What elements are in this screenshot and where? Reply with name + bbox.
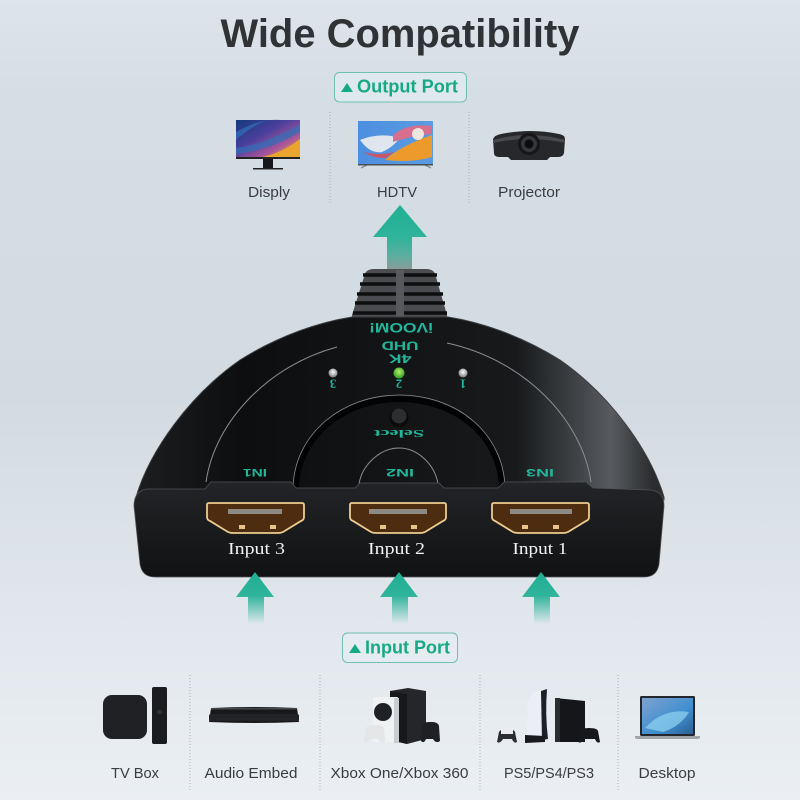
dome arcs bbox=[206, 343, 591, 487]
front face bbox=[134, 482, 664, 577]
output arrow bbox=[373, 205, 427, 270]
label: Desktop: Desktop bbox=[638, 765, 696, 782]
input labels on front: Input 1 bbox=[512, 539, 568, 558]
port labels on dome: IN3 bbox=[526, 466, 554, 478]
icon: laptop bbox=[635, 696, 700, 739]
icon: HDTV bbox=[358, 121, 433, 168]
badge: input port bbox=[342, 633, 458, 662]
icon: TV box bbox=[103, 687, 167, 744]
cable neck bbox=[352, 269, 447, 320]
icon: audio embed player bbox=[209, 707, 299, 723]
HDMI port 2 bbox=[350, 503, 446, 533]
label: Audio Embed: Audio Embed bbox=[204, 765, 298, 782]
HDMI port 3 bbox=[207, 503, 304, 533]
label: HDTV: HDTV bbox=[377, 184, 417, 201]
input labels on front: Input 2 bbox=[368, 539, 425, 558]
input labels on front: Input 3 bbox=[228, 539, 285, 558]
label: PS5/PS4/PS3: PS5/PS4/PS3 bbox=[504, 765, 594, 782]
input labels on front bbox=[228, 539, 568, 558]
select button: Select bbox=[373, 427, 424, 438]
title: Wide Compatibility bbox=[220, 12, 580, 56]
port labels on dome: IN2 bbox=[386, 466, 414, 478]
icon: Xbox consoles bbox=[364, 688, 440, 744]
brand and resolution text: UHD bbox=[381, 338, 418, 352]
brand and resolution text: iVOOM! bbox=[369, 320, 433, 336]
label: TV Box: TV Box bbox=[111, 765, 159, 782]
indicator LEDs bbox=[328, 368, 468, 392]
arrow: input 1 bbox=[522, 572, 560, 624]
indicator LEDs: 2 bbox=[396, 376, 402, 392]
arrow: input 2 bbox=[380, 572, 418, 624]
port labels on dome: IN1 bbox=[243, 466, 267, 478]
port labels on dome bbox=[243, 466, 554, 478]
icon: display monitor bbox=[236, 120, 300, 170]
label: Disply: Disply bbox=[248, 184, 291, 201]
label: Xbox One/Xbox 360: Xbox One/Xbox 360 bbox=[330, 765, 468, 782]
arrow: input 3 bbox=[236, 572, 274, 624]
switch device bbox=[134, 269, 664, 577]
label: Projector: Projector bbox=[498, 184, 560, 201]
icon: projector bbox=[493, 131, 565, 160]
badge: input port: Input Port bbox=[365, 638, 450, 658]
switch top dome bbox=[136, 317, 664, 500]
indicator LEDs: 3 bbox=[329, 376, 336, 392]
select button bbox=[373, 408, 424, 438]
brand and resolution text: 4K bbox=[388, 352, 412, 366]
badge: output port: Output Port bbox=[357, 76, 458, 96]
brand and resolution text bbox=[369, 320, 433, 366]
badge: output port bbox=[334, 72, 466, 102]
indicator LEDs: 1 bbox=[460, 376, 466, 392]
icon: PlayStation consoles bbox=[497, 689, 600, 743]
HDMI port 1 bbox=[492, 503, 589, 533]
